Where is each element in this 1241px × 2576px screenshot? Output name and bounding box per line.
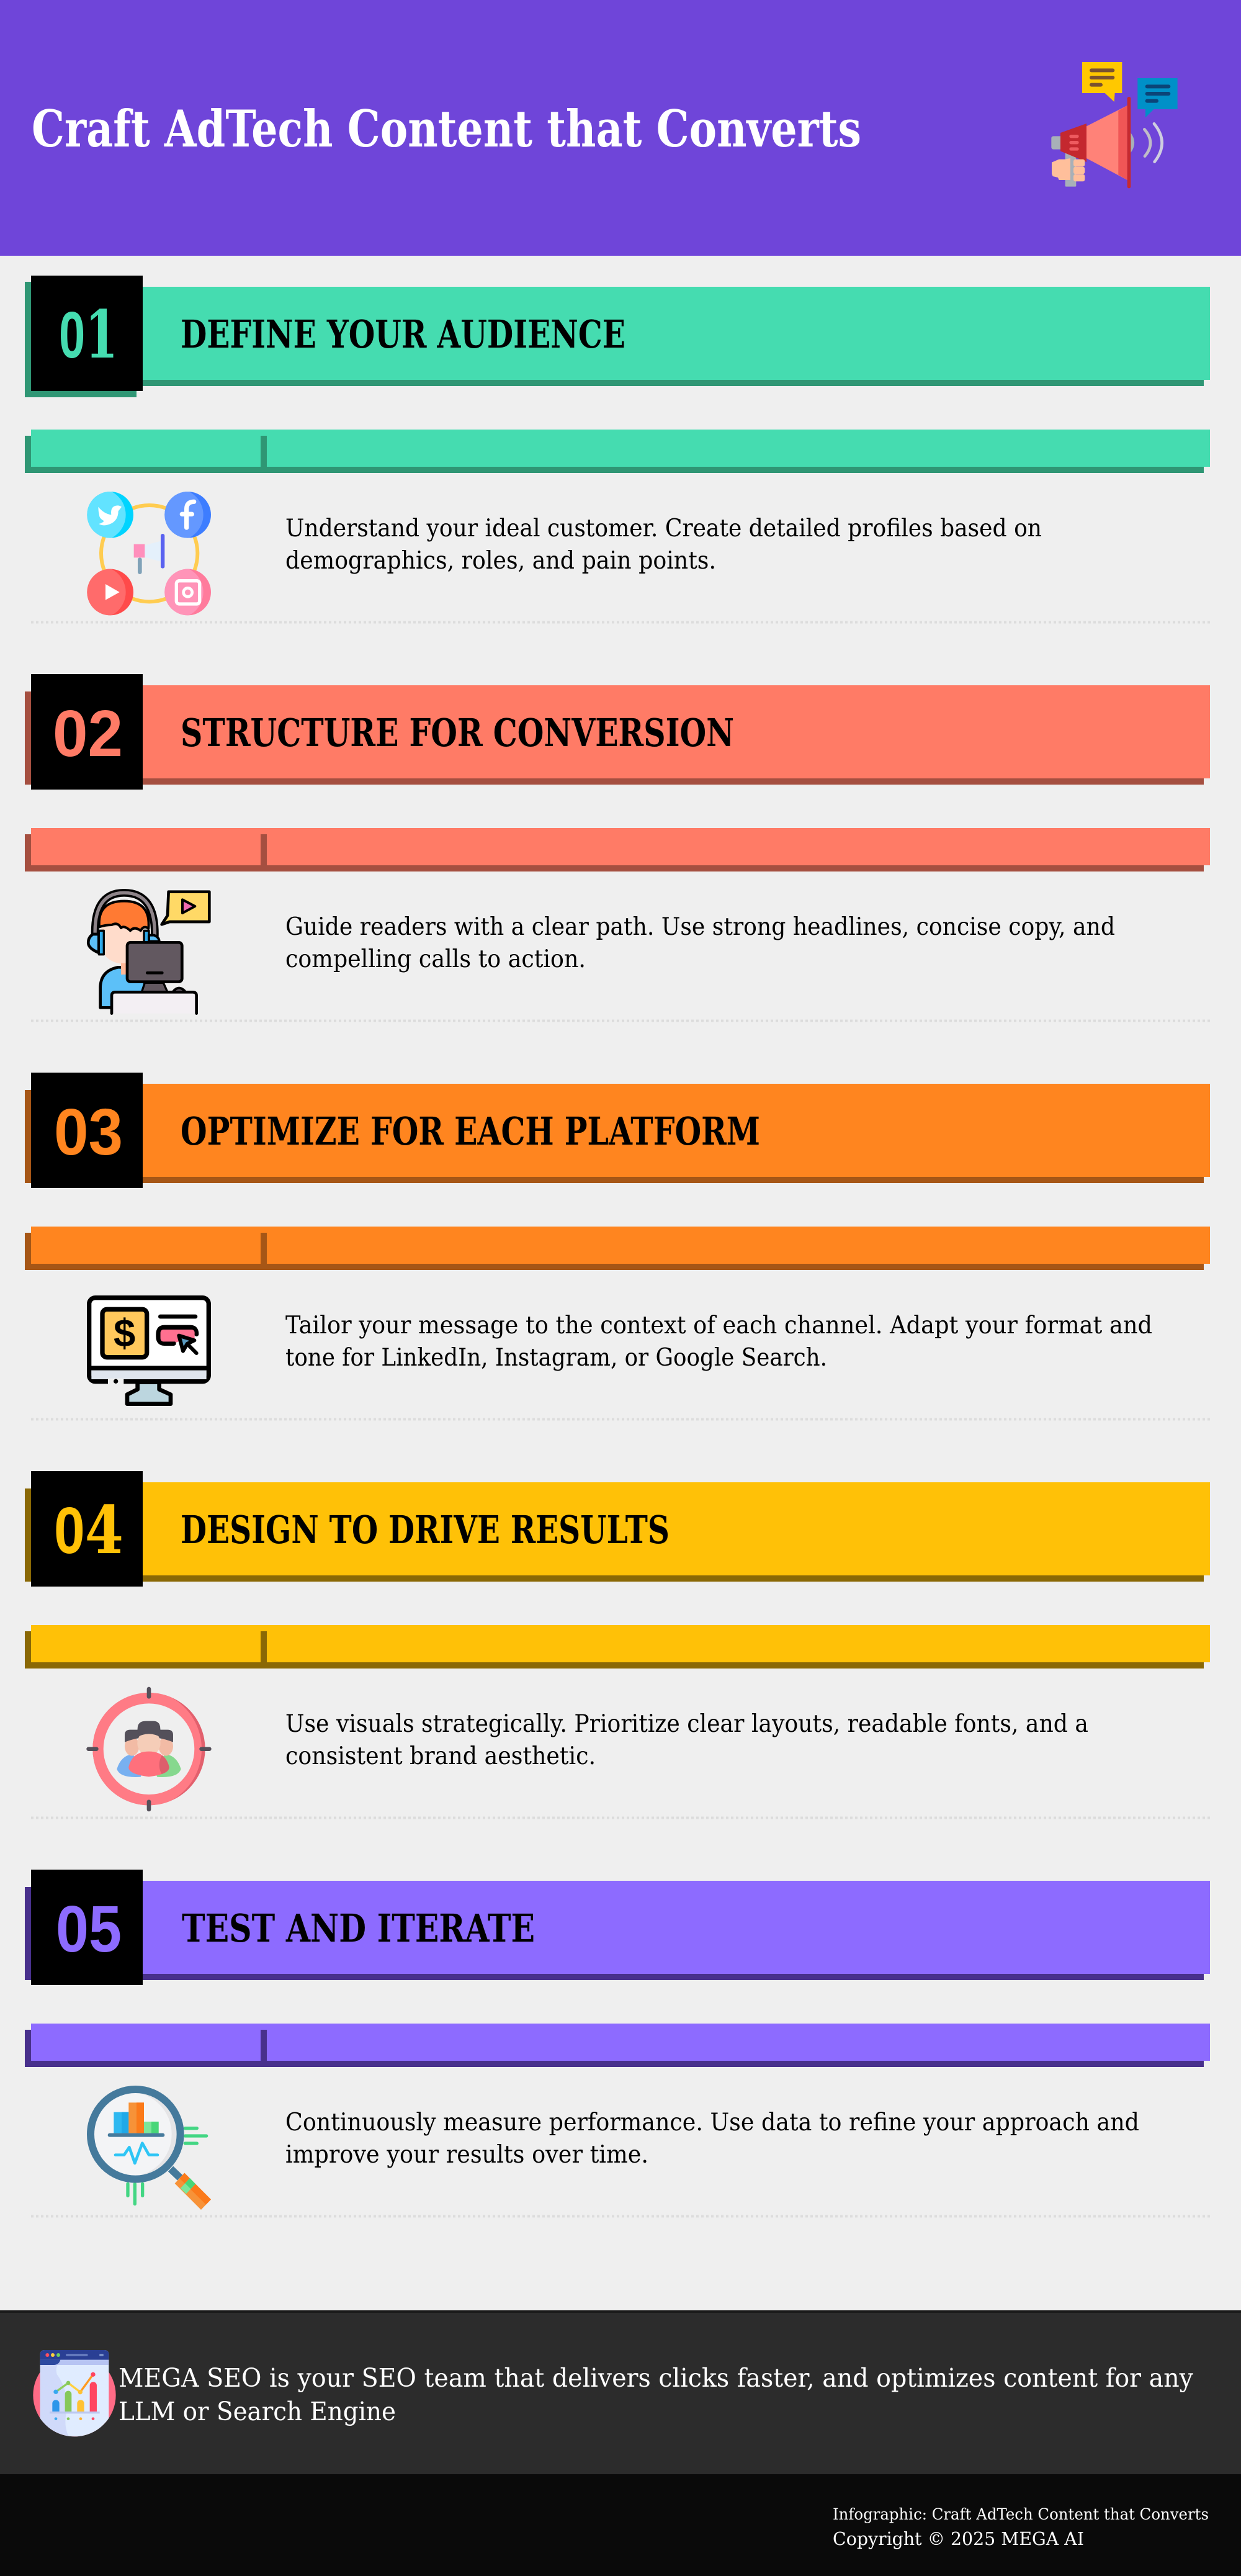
- description: Tailor your message to the context of each channel. Adapt your format and: [285, 1312, 1152, 1340]
- description: Guide readers with a clear path. Use strong headlines, concise copy, and: [285, 913, 1115, 941]
- panel: step 2 structure for conversion: [25, 674, 1210, 1014]
- promo text: MEGA SEO is your SEO team that delivers clicks faster, and optimizes content for any: [119, 2363, 1194, 2393]
- panel: step 4 design to drive results: [25, 1471, 1210, 1809]
- number badge 02: [31, 674, 143, 790]
- panel: step 1 define your audience: [25, 276, 1210, 618]
- title: Craft AdTech Content that Converts: [32, 100, 861, 159]
- heading band: [25, 685, 1210, 785]
- description: [285, 1710, 1088, 1770]
- description: [285, 913, 1115, 973]
- heading: OPTIMIZE FOR EACH PLATFORM: [181, 1109, 760, 1154]
- footer credit text: Copyright © 2025 MEGA AI: [833, 2528, 1084, 2549]
- number badge 02: 02: [53, 697, 123, 770]
- promo text: [119, 2363, 1194, 2426]
- description: Continuously measure performance. Use data to refine your approach and: [285, 2109, 1139, 2137]
- description: consistent brand aesthetic.: [285, 1742, 596, 1770]
- table header bar: [25, 430, 1210, 473]
- description: improve your results over time.: [285, 2141, 648, 2169]
- number badge 04: 04: [54, 1491, 123, 1569]
- heading: DEFINE YOUR AUDIENCE: [181, 312, 625, 357]
- icon: megaphone with speech bubbles: [1051, 62, 1178, 188]
- heading band: [137, 287, 1210, 386]
- description: demographics, roles, and pain points.: [285, 547, 716, 575]
- heading band: [25, 1482, 1210, 1582]
- table header bar: [25, 1625, 1210, 1669]
- table header bar: [25, 2024, 1210, 2067]
- number badge 05: 05: [56, 1893, 122, 1966]
- number badge 03: [31, 1073, 143, 1188]
- description: Understand your ideal customer. Create detailed profiles based on: [285, 515, 1042, 543]
- icon: monitor with ad and cursor: [89, 1298, 208, 1404]
- panel: step 3 optimize for each platform: [25, 1073, 1210, 1404]
- heading: TEST AND ITERATE: [182, 1906, 535, 1951]
- description: [285, 515, 1042, 575]
- icon: monitor with ad and cursor: $: [114, 1312, 135, 1355]
- icon: analytics browser window: [33, 2350, 116, 2436]
- panel: step 5 test and iterate: [25, 1870, 1210, 2210]
- footer: [0, 2474, 1241, 2576]
- table header bar: [25, 828, 1210, 871]
- description: compelling calls to action.: [285, 945, 586, 973]
- icon: target audience crosshair: [84, 1689, 209, 1809]
- description: Use visuals strategically. Prioritize clear layouts, readable fonts, and a: [285, 1710, 1088, 1738]
- heading band: [25, 1084, 1210, 1183]
- promo text: LLM or Search Engine: [119, 2397, 396, 2426]
- icon: person at computer with headset: [88, 892, 209, 1014]
- heading: STRUCTURE FOR CONVERSION: [181, 710, 734, 755]
- number badge 05: [31, 1870, 143, 1985]
- table header bar: [25, 1227, 1210, 1270]
- number badge 04: [31, 1471, 143, 1587]
- footer credit text: Infographic: Craft AdTech Content that Converts: [833, 2505, 1209, 2523]
- footer credit text: [833, 2505, 1209, 2549]
- header banner: [0, 0, 1241, 256]
- number badge shadow: [25, 282, 137, 397]
- heading band: [25, 1881, 1210, 1980]
- description: tone for LinkedIn, Instagram, or Google Search.: [285, 1344, 827, 1372]
- description: [285, 1312, 1152, 1372]
- heading: DESIGN TO DRIVE RESULTS: [181, 1507, 670, 1552]
- icon: social media ring: [87, 492, 211, 616]
- description: [285, 2109, 1139, 2169]
- icon: magnifying glass with chart: [87, 2089, 211, 2210]
- number badge 01: 01: [59, 295, 118, 373]
- number badge 03: 03: [54, 1096, 123, 1169]
- number badge 01: [31, 276, 143, 391]
- panel: MEGA SEO promo: [0, 2310, 1241, 2474]
